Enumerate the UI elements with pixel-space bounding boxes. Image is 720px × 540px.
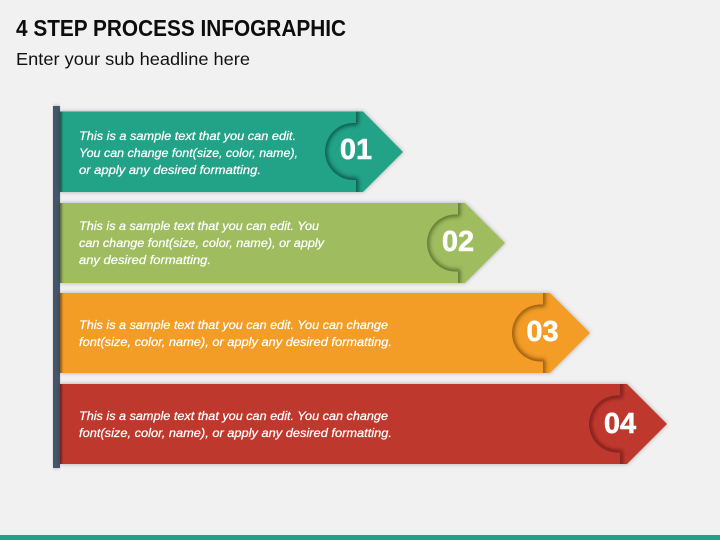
vertical pole [53,106,60,468]
bottom bar [0,535,720,540]
step 1: green arrow: or apply any desired formatting. [79,163,261,177]
step 2: olive green arrow [60,199,505,287]
step 2: olive green arrow: can change font(size, color, name), or apply [79,236,325,250]
step 3 number: 03 [526,316,559,348]
step 2: olive green arrow: any desired formatting. [79,253,211,267]
step 2 text: This is a sample text that you can edit. You [79,219,319,233]
step 3: orange arrow [60,289,590,377]
step 2 number: 02 [442,226,474,258]
step 3 text: This is a sample text that you can edit. You can change [79,318,388,332]
subtitle: Enter your sub headline here [16,49,250,69]
step 1 text: This is a sample text that you can edit. [79,129,296,143]
step 1: green arrow [60,108,403,196]
step 4: red arrow: font(size, color, name), or apply any desired formatting. [79,426,392,440]
step 4 number: 04 [604,408,636,440]
step 4: red arrow [60,380,667,468]
title: 4 STEP PROCESS INFOGRAPHIC [16,15,346,41]
step 1: green arrow: You can change font(size, color, name), [79,146,298,160]
step 4 text: This is a sample text that you can edit. You can change [79,409,388,423]
step 1 number: 01 [340,134,372,166]
step 3: orange arrow: font(size, color, name), or apply any desired formatting. [79,335,392,349]
